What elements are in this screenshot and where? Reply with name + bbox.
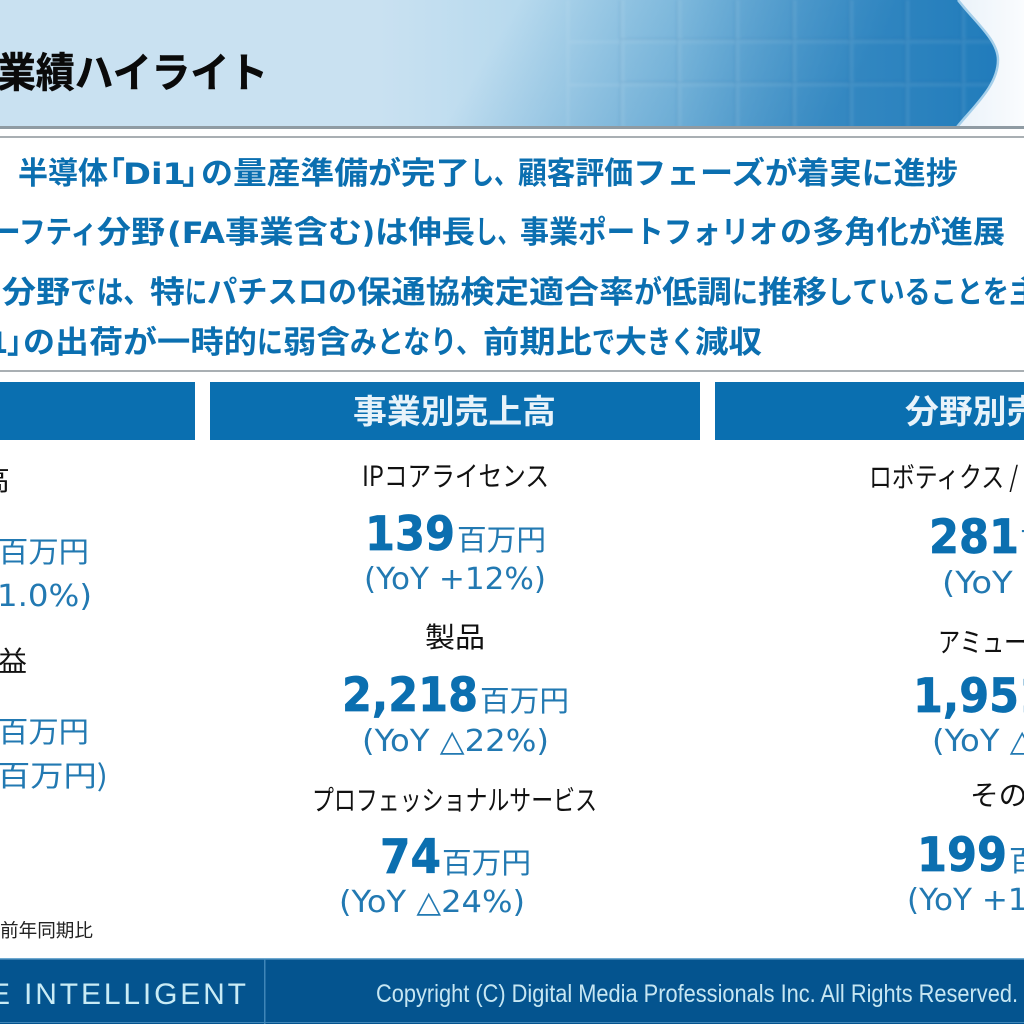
panel: sales by segment — [715, 382, 1024, 918]
bullet: AI semiconductor line: 顧客評価 — [518, 148, 633, 193]
bullet: robotics and safety line: (FA — [167, 216, 226, 250]
bullet: amusement line 2: 前期比 — [483, 317, 592, 362]
header bar: earnings — [0, 382, 195, 440]
bullet: AI semiconductor line: Di1 — [123, 157, 186, 191]
bullet: amusement line 2: 」 — [7, 317, 36, 362]
bullet: amusement line 2: 大 — [615, 317, 647, 362]
bullet: amusement line 1: の — [328, 267, 357, 312]
metric: robotics and safety — [869, 456, 1024, 601]
panel: earnings — [0, 382, 195, 943]
bullet: robotics and safety line — [0, 207, 1005, 252]
bullet: AI semiconductor line: フェーズ — [633, 148, 765, 193]
bullet: robotics and safety line: 分野 — [97, 207, 165, 252]
bullet: amusement line 1: 推移 — [758, 267, 827, 312]
metric: IP core license: 139 — [365, 507, 455, 562]
bullet: amusement line 1: 適合率 — [529, 267, 634, 312]
bullet: amusement line 2: に — [257, 317, 283, 362]
bullet: AI semiconductor line: が着実に進捗 — [765, 148, 958, 193]
bullet: amusement line 1 — [2, 267, 1024, 312]
heading: sales by business: 事業別売上高 — [353, 385, 556, 433]
panel: sales by business — [210, 382, 700, 920]
bullet: amusement line 2: みとなり、 — [350, 317, 483, 362]
bullet: amusement line 2: 出荷が — [55, 317, 157, 362]
metric: products — [342, 616, 569, 759]
bullet: amusement line 1: 保通協検定 — [357, 267, 529, 312]
bullet: AI semiconductor line: 半導体 — [18, 148, 108, 193]
bullet: AI semiconductor line: 「 — [94, 148, 125, 193]
metric: IP core license: (YoY +12%) — [364, 562, 546, 597]
bullet: AI semiconductor line — [0, 148, 958, 193]
bullet: robotics and safety line: の多角化が進展 — [780, 207, 1005, 252]
bullet: robotics and safety line: ) — [362, 216, 375, 250]
bullet: amusement line 2: 弱含 — [283, 317, 350, 362]
bullet: AI semiconductor line: 量産準備 — [233, 148, 368, 193]
bullet: amusement line 2 — [0, 317, 762, 362]
metric: amusement — [913, 621, 1024, 759]
metric: professional services: プロフェッショナルサービス — [312, 779, 597, 819]
unit: operating profit: 百万円 — [0, 709, 89, 751]
bullet: amusement line 1: パチスロ — [207, 267, 328, 312]
bullet: amusement line 1: が — [634, 267, 662, 312]
bullet: robotics and safety line: し、 — [475, 207, 520, 252]
bullet: robotics and safety line: 事業含む — [225, 207, 362, 252]
metric: products: 製品 — [425, 616, 485, 656]
footnote: 前年同期比 — [0, 917, 93, 943]
bullet: amusement line 1: では、 — [70, 267, 150, 312]
bullet: AI semiconductor line: 完了 — [401, 148, 470, 193]
metric: products: 百万円 — [480, 678, 569, 720]
footer bar — [0, 958, 1024, 1024]
bullet: amusement line 1: 低調 — [662, 267, 732, 312]
metric: professional services — [312, 779, 597, 920]
bullet: robotics and safety line: ポートフォリオ — [578, 207, 778, 252]
bullet: amusement line 2: で — [592, 317, 615, 362]
bullet: amusement line 1: に — [732, 267, 758, 312]
metric: IP core license: 百万円 — [457, 517, 546, 559]
title: 業績ハイライト — [0, 39, 268, 99]
bullet: AI semiconductor line: の — [201, 148, 233, 193]
bullet: amusement line 2: きく — [647, 317, 695, 362]
metric: IP core license: IPコアライセンス — [362, 455, 549, 495]
highlights text block — [0, 148, 1024, 362]
bullet: AI semiconductor line: し、 — [470, 148, 518, 193]
bullet: amusement line 1: 分野 — [2, 267, 70, 312]
unit: net sales: 百万円 — [0, 529, 89, 571]
metric: professional services: 74 — [380, 830, 441, 885]
metric: professional services: (YoY △24%) — [339, 885, 525, 920]
bullet: AI semiconductor line: 」 — [182, 148, 213, 193]
metric: IP core license — [362, 455, 549, 597]
bullet: AI semiconductor line: が — [368, 148, 401, 193]
bullet: amusement line 1: 特 — [150, 267, 185, 312]
header bar: sales by business — [210, 382, 700, 440]
bullet: amusement line 1: に — [185, 267, 207, 312]
bullet: robotics and safety line: 事業 — [520, 207, 578, 252]
bullet: amusement line 2: 減収 — [695, 317, 762, 362]
metric: other: 199 — [917, 828, 1007, 883]
header banner — [0, 0, 1024, 138]
bullet: amusement line 2: 一時的 — [157, 317, 257, 362]
bullet: robotics and safety line: は伸長 — [375, 207, 475, 252]
bullet: amusement line 2: の — [23, 317, 55, 362]
metric: products: 2,218 — [342, 668, 478, 723]
metric: professional services: 百万円 — [442, 840, 531, 882]
metric: products: (YoY △22%) — [362, 724, 549, 759]
metric: other — [907, 774, 1024, 918]
header bar: sales by segment — [715, 382, 1024, 440]
